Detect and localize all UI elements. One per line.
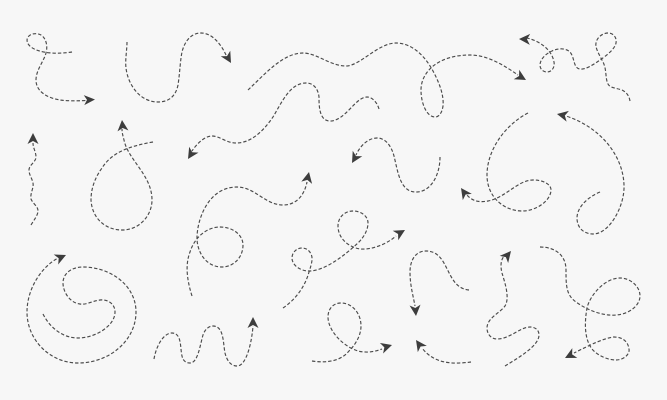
arrow: top-left loop [27, 34, 95, 105]
arrow: short curve pointing up-left [411, 337, 471, 363]
arrow: long wave with loop [248, 43, 529, 117]
arrow: U curve [126, 33, 236, 102]
arrow: bottom squiggle [154, 317, 258, 366]
arrow: bottom centre loop [312, 303, 394, 362]
arrow: bottom-right double loop [540, 247, 640, 363]
arrow: left vertical wavy [28, 133, 38, 225]
arrow: right loop pointing up-left [456, 113, 551, 211]
arrow: double loop centre [283, 211, 408, 308]
arrow: hook pointing down [410, 251, 469, 316]
arrow: centre loop going up [187, 171, 314, 296]
arrow: hook pointing lower-left [347, 138, 440, 192]
arrow: right large curl [556, 109, 624, 234]
arrow: teardrop loop [91, 120, 153, 230]
arrow: S wave pointing up-right [487, 247, 539, 366]
arrow: top-right double loop [519, 33, 630, 101]
arrow: bottom-left spiral [27, 250, 136, 363]
arrow: middle wave pointing left [183, 83, 379, 162]
